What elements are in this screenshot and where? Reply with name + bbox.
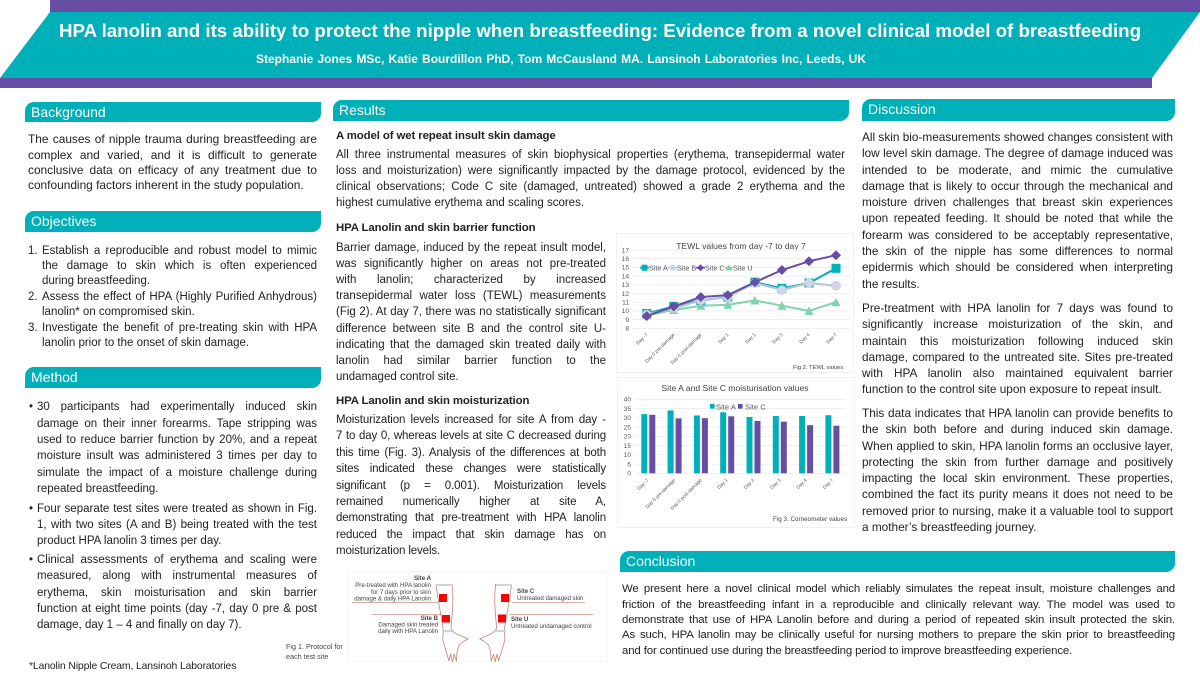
bars: site A [641, 410, 831, 473]
y axis labels: 10 [624, 452, 631, 459]
x axis labels: Day 1 [716, 477, 730, 491]
heading: Method [25, 367, 321, 388]
text: discussion paragraph 1 [862, 130, 1173, 291]
y axis labels: 5 [627, 461, 631, 468]
bullet: assessments: function at eight time points (day -7, day 0 pre & post [37, 603, 317, 615]
list: objectives: Assess the effect of HPA (Highly Purified Anhydrous) [42, 291, 317, 303]
figure 3: moisturisation bar chart [617, 377, 855, 528]
site labels: Site A [414, 575, 432, 582]
text: discussion paragraph 1: All skin bio-measurements showed changes consistent with [862, 130, 1173, 144]
text: discussion paragraph 3: impacting the local skin environment. These properties, [862, 471, 1173, 485]
heading: Discussion: Discussion [868, 101, 936, 117]
gridlines [632, 250, 850, 328]
site labels: Untreated undamaged control [511, 623, 592, 630]
heading: Results: Results [339, 102, 386, 118]
text: model: loss and moisturization) were significantly impacted by the damage protocol, evidenced by the [336, 165, 845, 177]
text: conclusion [622, 583, 1175, 657]
text: model: clinical observations; Code C site (damaged, untreated) showed a grade 2 erythema and the [336, 181, 845, 193]
y axis labels: 35 [624, 406, 631, 413]
title: HPA lanolin and its ability to protect the nipple when breastfeeding: Evidence from a novel clinical model of breastfeeding [59, 20, 1141, 41]
bullet: assessments: damage, day 1 – 4 and finally on day 7). [37, 619, 242, 631]
y axis labels: 13 [622, 282, 629, 289]
list: objectives: lanolin* on compromised skin. [42, 306, 195, 318]
y axis labels: 25 [624, 424, 631, 431]
bullet: participants: repeated breastfeeding. [37, 483, 158, 495]
site labels: Untreated damaged skin [517, 595, 583, 602]
text: discussion paragraph 3: a mother’s breastfeeding journey. [862, 520, 1036, 534]
text: moisturization: 7 to day 0, whereas levels at site C decreased during [336, 430, 606, 442]
x axis labels: Day 3 [769, 477, 783, 491]
text: moisturization: sites indicated these changes were statistically [336, 463, 606, 475]
x axis labels: Day 0 post-damage [670, 477, 704, 512]
text: barrier function: Barrier damage, induced by the repeat insult model, [336, 242, 606, 254]
x axis labels: Day 7 [825, 332, 839, 345]
text: model: highest cumulative erythema and scaling scores. [336, 197, 584, 209]
x axis labels [635, 332, 839, 366]
figure 2 caption: Fig 2. TEWL values [793, 365, 843, 371]
text: conclusion: demonstrate that use of HPA Lanolin before and during a period of repeated skin insult protected the skin. [622, 614, 1175, 626]
text: discussion paragraph 3: When applied to skin, HPA lanolin forms an occlusive layer, [862, 439, 1173, 453]
list: objectives: Investigate the benefit of pre-treating skin with HPA [42, 322, 317, 334]
x axis labels: Day 1 [717, 332, 731, 345]
y axis labels: 8 [625, 326, 629, 333]
x axis labels: Day 7 [822, 477, 835, 491]
text: discussion paragraph 3: removed prior to nursing, make it a valuable tool to support [862, 504, 1173, 518]
list: objectives [28, 245, 317, 349]
heading: Results [333, 100, 849, 121]
legend: Site C [745, 402, 766, 411]
text: barrier function: indicating that the damaged skin treated daily with [336, 339, 606, 351]
bullet: test sites: product HPA lanolin 3 times per day. [37, 535, 221, 547]
y axis labels: 9 [625, 317, 629, 324]
y axis labels: 40 [624, 397, 631, 404]
subheading: wet repeat insult model: A model of wet repeat insult skin damage [336, 130, 556, 142]
site labels: for 7 days prior to skin [371, 589, 431, 596]
text: discussion paragraph 1: intended to be moderate, and mimic the cumulative [862, 163, 1173, 177]
x axis labels [636, 477, 835, 512]
left arm [436, 584, 468, 662]
text: discussion paragraph 1: damage that is likely to occur through the mechanical and [862, 179, 1173, 193]
text: conclusion: and for continued use during the breastfeeding period to improve breastfeeding experience. [622, 645, 1072, 657]
text: discussion paragraph 2: function to the control site upon exposure to repeat insult. [862, 382, 1162, 396]
x axis labels: Day 4 [795, 477, 809, 491]
text: barrier function: with lanolin; characterized by increased [336, 274, 606, 286]
heading: Method: Method [31, 369, 78, 385]
figure 1 caption: Fig 1. Protocol for [286, 642, 343, 651]
x axis labels: Day 0 pre-damage [644, 332, 677, 365]
banner shapes [0, 0, 1200, 88]
text: discussion paragraph 1: forearm was considered to be acceptably representative, [862, 228, 1173, 242]
text: barrier function: difference between site B and the control site U- [336, 323, 606, 335]
text: discussion paragraph 3: combined the fact its purity means it does not need to be [862, 487, 1173, 501]
bullet: assessments: • [29, 554, 33, 566]
text: discussion paragraph 1: low level skin damage. The degree of damage induced was [862, 146, 1173, 160]
text: discussion paragraph 3 [862, 406, 1173, 534]
y axis labels: 17 [622, 247, 629, 254]
text: discussion paragraph 2: with HPA lanolin also maintained equivalent barrier [862, 366, 1173, 380]
list: objectives: 3. [28, 322, 38, 334]
text: background: The causes of nipple trauma during breastfeeding are [28, 132, 317, 146]
subheading: barrier function: HPA Lanolin and skin barrier function [336, 222, 535, 234]
text: conclusion: friction of the breastfeeding infant in a reproducible and clinically relevant way. The model was used to [622, 599, 1175, 611]
text: barrier function: undamaged control site. [336, 371, 459, 383]
y axis labels: 10 [622, 308, 629, 315]
text: discussion paragraph 2: Pre-treatment with HPA lanolin for 7 days was found to [862, 301, 1173, 315]
text: moisturization: significant (p = 0.001). Moisturization levels [336, 480, 606, 492]
x axis labels: Day 3 [771, 332, 785, 345]
heading: Background: Background [31, 104, 106, 120]
text: conclusion: As such, HPA lanolin may be clinically useful for nursing mothers to prepare the skin prior to breastfeeding [622, 629, 1175, 641]
text: moisturization: reduced the impact that skin damage has on [336, 529, 606, 541]
x axis labels: Day 2 [743, 477, 756, 491]
text: barrier function: lanolin had similar barrier function to the [336, 355, 606, 367]
figure 1: protocol diagram [347, 571, 608, 662]
series [647, 255, 836, 316]
figure 1 caption: each test site [286, 652, 328, 661]
bullet: assessments: erythema, skin moisturisation and skin barrier [37, 587, 317, 599]
text: discussion paragraph 1: the skin of the nipple has some differences to normal [862, 244, 1173, 258]
bullet: participants: used to reduce barrier function by 20%, and a repeat [37, 434, 317, 446]
chart title: TEWL values from day -7 to day 7 [676, 241, 806, 251]
legend [710, 402, 766, 411]
list: objectives: lanolin prior to the onset of skin damage. [42, 337, 249, 349]
site labels: Site U [511, 616, 529, 623]
y axis labels: 15 [624, 443, 631, 450]
site labels: Site B [421, 615, 439, 622]
text: discussion paragraph 2: significantly increase moisturization of the skin, and [862, 317, 1173, 331]
bullet: test sites [29, 503, 317, 547]
text: discussion paragraph 1: the results. [862, 277, 920, 291]
text: background: confounding factors inherent in the study population. [28, 178, 304, 192]
x axis labels: Day -7 [636, 477, 651, 492]
x axis labels: Day 0 post-damage [670, 332, 704, 366]
text: discussion paragraph 2: maintain this moisturization following induced skin [862, 334, 1173, 348]
subheading: moisturization: HPA Lanolin and skin moisturization [336, 395, 529, 407]
text: discussion paragraph 1: moisture driven challenges that breast skin experiences [862, 195, 1173, 209]
text: model [336, 149, 845, 209]
text: moisturization: this time (Fig. 3). Analysis of the differences at both [336, 447, 606, 459]
legend: Site C [705, 263, 725, 272]
figure 2: TEWL line chart [616, 233, 854, 373]
gridlines [635, 399, 846, 473]
heading: Conclusion [620, 551, 1175, 572]
heading: Conclusion: Conclusion [626, 553, 695, 569]
text: discussion paragraph 1: epidermis which should be considered when interpreting [862, 260, 1173, 274]
figure 1 caption [286, 642, 343, 661]
bullet: test sites: • [29, 503, 33, 515]
text: discussion paragraph 3: This data indicates that HPA lanolin can provide benefits to [862, 406, 1173, 420]
text: moisturization: remained numerically higher at site A, [336, 496, 606, 508]
text: discussion paragraph 3: protecting the skin from further damage and positively [862, 455, 1173, 469]
bullet: assessments: Clinical assessments of erythema and scaling were [37, 554, 317, 566]
list: objectives: during breastfeeding. [42, 275, 150, 287]
text: moisturization [336, 414, 606, 557]
text: moisturization: Moisturization levels increased for site A from day - [336, 414, 606, 426]
x axis labels: Day 2 [744, 332, 758, 345]
y axis labels: 14 [622, 273, 629, 280]
text: background: complex and varied, and it is difficult to generate [28, 148, 317, 162]
bullet: assessments: measured, along with instrumental measures of [37, 570, 317, 582]
text: moisturization: demonstrating that pre-treatment with HPA lanolin [336, 512, 606, 524]
test site squares [439, 594, 509, 622]
x axis labels: Day 0 pre-damage [645, 477, 677, 510]
legend: Site A [649, 263, 668, 272]
y axis labels: 16 [622, 256, 629, 263]
bullet: assessments [29, 554, 317, 631]
list: objectives: 2. [28, 291, 38, 303]
text: barrier function: (Fig 2). At day 7, there was no statistically significant [336, 306, 606, 318]
legend: Site A [716, 402, 737, 411]
heading: Objectives: Objectives [31, 213, 96, 229]
heading: Discussion [862, 99, 1175, 121]
legend [640, 263, 753, 272]
text: discussion paragraph 3: the skin both before and during induced skin damage. [862, 422, 1173, 436]
site labels: Damaged skin treated [378, 622, 438, 628]
bullet: test sites: Four separate test sites were treated as shown in Fig. [37, 503, 317, 515]
bars: site C [649, 415, 839, 473]
site labels: damage & daily HPA Lanolin [354, 596, 431, 602]
legend: Site U [733, 263, 753, 272]
bullet: participants: • [29, 401, 33, 413]
list: objectives: 1. [28, 245, 38, 257]
bullet: participants: 30 participants had experimentally induced skin [37, 401, 317, 413]
text: background [28, 132, 317, 192]
text: moisturization: moisturization levels. [336, 545, 440, 557]
bullet: participants: moisture insult was administered 3 times per day to [37, 450, 317, 462]
chart title: Site A and Site C moisturisation values [661, 383, 809, 393]
text: discussion paragraph 2 [862, 301, 1173, 396]
list: objectives: Establish a reproducible and robust model to mimic [42, 245, 317, 257]
y axis labels: 30 [624, 415, 631, 422]
y axis labels: 15 [622, 265, 629, 272]
text: model: All three instrumental measures of skin biophysical properties (erythema, transepidermal water [336, 149, 845, 161]
y axis labels: 12 [622, 291, 629, 298]
site labels: Site C [517, 588, 535, 595]
text: discussion paragraph 2: damage, compared to the untreated site. Sites pre-treated [862, 350, 1173, 364]
bullet: participants: damage on their inner forearms. Tape stripping was [37, 418, 317, 430]
x axis labels: Day 4 [798, 332, 812, 345]
bullet: participants [29, 401, 317, 495]
figure 3 caption: Fig 3. Corneometer values [773, 516, 847, 523]
y axis labels: 0 [627, 471, 631, 478]
heading: Background [25, 102, 321, 122]
leader lines [352, 602, 593, 614]
list: objectives: the damage to skin which is often experienced [42, 260, 317, 272]
site labels: daily with HPA Lanolin [378, 628, 438, 635]
text: barrier function: was significantly higher on areas not pre-treated [336, 258, 606, 270]
y axis labels: 20 [624, 434, 631, 441]
text: barrier function [336, 242, 606, 383]
x axis labels: Day -7 [635, 332, 650, 346]
header banner [0, 0, 1200, 88]
heading: Objectives [25, 211, 321, 232]
footnote: *Lanolin Nipple Cream, Lansinoh Laboratories [29, 661, 236, 672]
site labels [354, 575, 592, 635]
y axis labels [622, 247, 629, 333]
y axis labels [624, 397, 631, 478]
right arm [480, 584, 512, 662]
text: background: conclusive data on efficacy of any treatment due to [28, 163, 317, 177]
text: conclusion: We present here a novel clinical model which reliably simulates the repeat insult, moisture challenges and [622, 583, 1175, 595]
bullet: test sites: 1, with two sites (A and B) being treated with the test [37, 519, 317, 531]
bullet: participants: simulate the impact of a moisture challenge during [37, 467, 317, 479]
legend: Site B [677, 263, 696, 272]
site labels: Pre-treated with HPA lanolin [355, 582, 431, 589]
authors: Stephanie Jones MSc, Katie Bourdillon PhD, Tom McCausland MA. Lansinoh Laboratories Inc, Leeds, UK [256, 52, 866, 66]
y axis labels: 11 [622, 300, 629, 306]
text: barrier function: transepidermal water loss (TEWL) measurements [336, 290, 606, 302]
text: discussion paragraph 1: upon repeated feeding. It should be noted that while the [862, 211, 1173, 225]
